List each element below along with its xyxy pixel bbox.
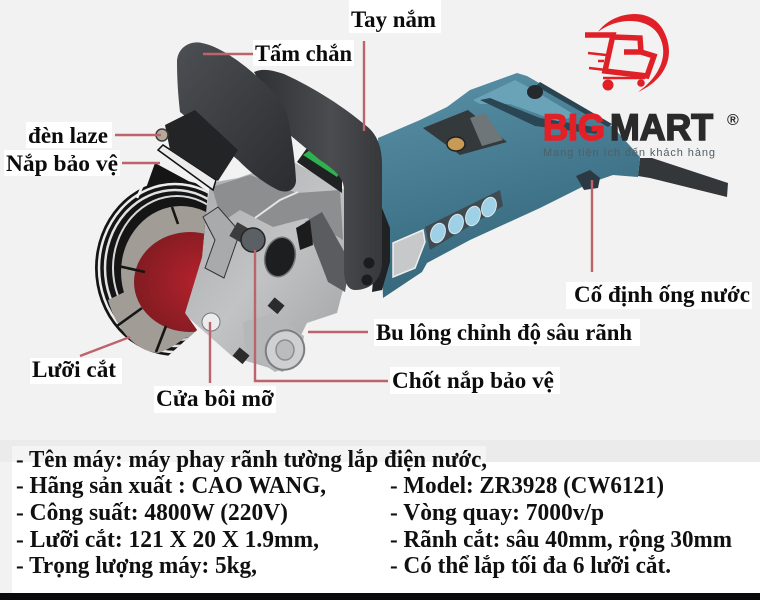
water pipe clamp	[576, 170, 600, 190]
spec: groove: - Rãnh cắt: sâu 40mm, rộng 30mm	[390, 527, 732, 553]
QR sticker	[393, 230, 425, 277]
logo letter mark	[585, 35, 654, 76]
blade stripe 1	[98, 182, 208, 354]
spec panel white area	[12, 462, 760, 593]
guard dark inner	[130, 163, 205, 290]
top grip slot	[473, 80, 575, 122]
logo: BIGMART	[543, 14, 739, 159]
panel button 2	[446, 212, 466, 236]
logo wheel right	[637, 79, 645, 87]
handle screw lower	[362, 274, 372, 286]
logo wheel left	[602, 80, 614, 90]
spec: blade: - Lưỡi cắt: 121 X 20 X 1.9mm,	[16, 527, 319, 553]
rating label	[423, 110, 507, 155]
gearbox bracket	[203, 207, 240, 278]
bolt upper	[268, 297, 285, 314]
dark strip beside handle	[372, 203, 390, 292]
guard plate	[177, 42, 296, 192]
spirit level	[297, 148, 342, 193]
spec: manufacturer: - Hãng sản xuất : CAO WANG,	[16, 473, 326, 499]
blade outer ring	[95, 181, 208, 356]
rating label details	[470, 113, 503, 146]
illustration: wall chaser machine	[95, 42, 728, 377]
spec panel background band	[0, 440, 760, 462]
spec: model: - Model: ZR3928 (CW6121)	[390, 473, 664, 499]
casting body	[183, 160, 350, 372]
line: Chốt nắp bảo vệ	[255, 250, 388, 381]
label: Lưỡi cắt: Lưỡi cắt	[32, 357, 116, 382]
blade stripe 3	[112, 195, 207, 341]
panel button 4	[479, 195, 499, 219]
label: Nắp bảo vệ: Nắp bảo vệ	[6, 151, 118, 176]
vent slots	[480, 98, 600, 134]
label: Cố định ống nước: Cố định ống nước	[574, 282, 750, 307]
logo speed lines	[588, 53, 606, 70]
wordmark BIG: BIG	[543, 107, 605, 148]
label: đèn laze: đèn laze	[28, 123, 108, 148]
blade	[95, 181, 208, 356]
grease port	[202, 313, 220, 331]
spec first-row light area	[12, 446, 486, 462]
blade grey band	[121, 206, 206, 338]
roller centre	[276, 340, 294, 360]
line: Nắp bảo vệ	[122, 162, 160, 164]
casting top textured surface	[212, 175, 343, 240]
blade lower band	[108, 292, 186, 353]
bolt lower	[233, 347, 250, 364]
line: Tay nắm	[363, 41, 365, 131]
brand badge	[447, 137, 465, 151]
label: Tay nắm: Tay nắm	[351, 7, 436, 32]
blade guard outline	[137, 160, 154, 198]
spec: speed: - Vòng quay: 7000v/p	[390, 500, 604, 526]
lock knob	[241, 228, 265, 252]
small square opening	[296, 220, 313, 250]
label: Bu lông chỉnh độ sâu rãnh: Bu lông chỉnh độ sâu rãnh	[376, 320, 632, 345]
switch button	[527, 85, 543, 99]
spec: max blades: - Có thể lắp tối đa 6 lưỡi cắt.	[390, 553, 671, 579]
label: Tấm chắn: Tấm chắn	[255, 41, 352, 66]
bottom black strip	[0, 593, 760, 600]
label: Chốt nắp bảo vệ: Chốt nắp bảo vệ	[392, 368, 554, 393]
wordmark MART: MART	[610, 107, 713, 148]
registered mark: ®	[727, 112, 739, 129]
lock knob stem	[229, 222, 255, 246]
rear ridge	[536, 82, 612, 127]
blade stripe 2	[104, 188, 208, 348]
logo cart base	[603, 77, 645, 79]
label: Cửa bôi mỡ: Cửa bôi mỡ	[156, 386, 274, 411]
line: đèn laze	[115, 134, 161, 136]
blade red centre	[134, 232, 204, 332]
spec: power: - Công suất: 4800W (220V)	[16, 500, 288, 526]
panel button 1	[428, 221, 448, 245]
spec: weight: - Trọng lượng máy: 5kg,	[16, 553, 257, 579]
handle screw upper	[364, 258, 374, 268]
panel button 3	[463, 204, 483, 228]
dust port	[260, 234, 300, 280]
spec: machine name: - Tên máy: máy phay rãnh tường lắp điện nước,	[16, 447, 487, 473]
control panel strip	[425, 190, 503, 250]
line: Cố định ống nước	[591, 180, 593, 272]
power cable	[638, 158, 728, 197]
laser housing	[165, 110, 238, 181]
line: Cửa bôi mỡ	[209, 322, 211, 383]
motor body	[378, 73, 640, 298]
line: Lưỡi cắt	[80, 337, 130, 356]
blade slot lines	[117, 207, 178, 352]
guard top cover	[158, 145, 216, 190]
spec panel	[0, 440, 760, 593]
casting highlight ridge	[255, 192, 298, 218]
right dark casting flank	[305, 212, 350, 292]
logo crescent	[598, 14, 669, 92]
roller end cap	[259, 323, 311, 377]
roller housing	[243, 314, 304, 372]
callout lines	[80, 41, 592, 383]
line: Bu lông	[308, 331, 368, 333]
tagline: Mang tiện ích đến khách hàng	[543, 147, 715, 159]
line: Tấm chắn	[203, 53, 255, 55]
handle	[254, 70, 382, 290]
spirit level green	[303, 150, 340, 177]
laser lamp	[156, 129, 168, 141]
